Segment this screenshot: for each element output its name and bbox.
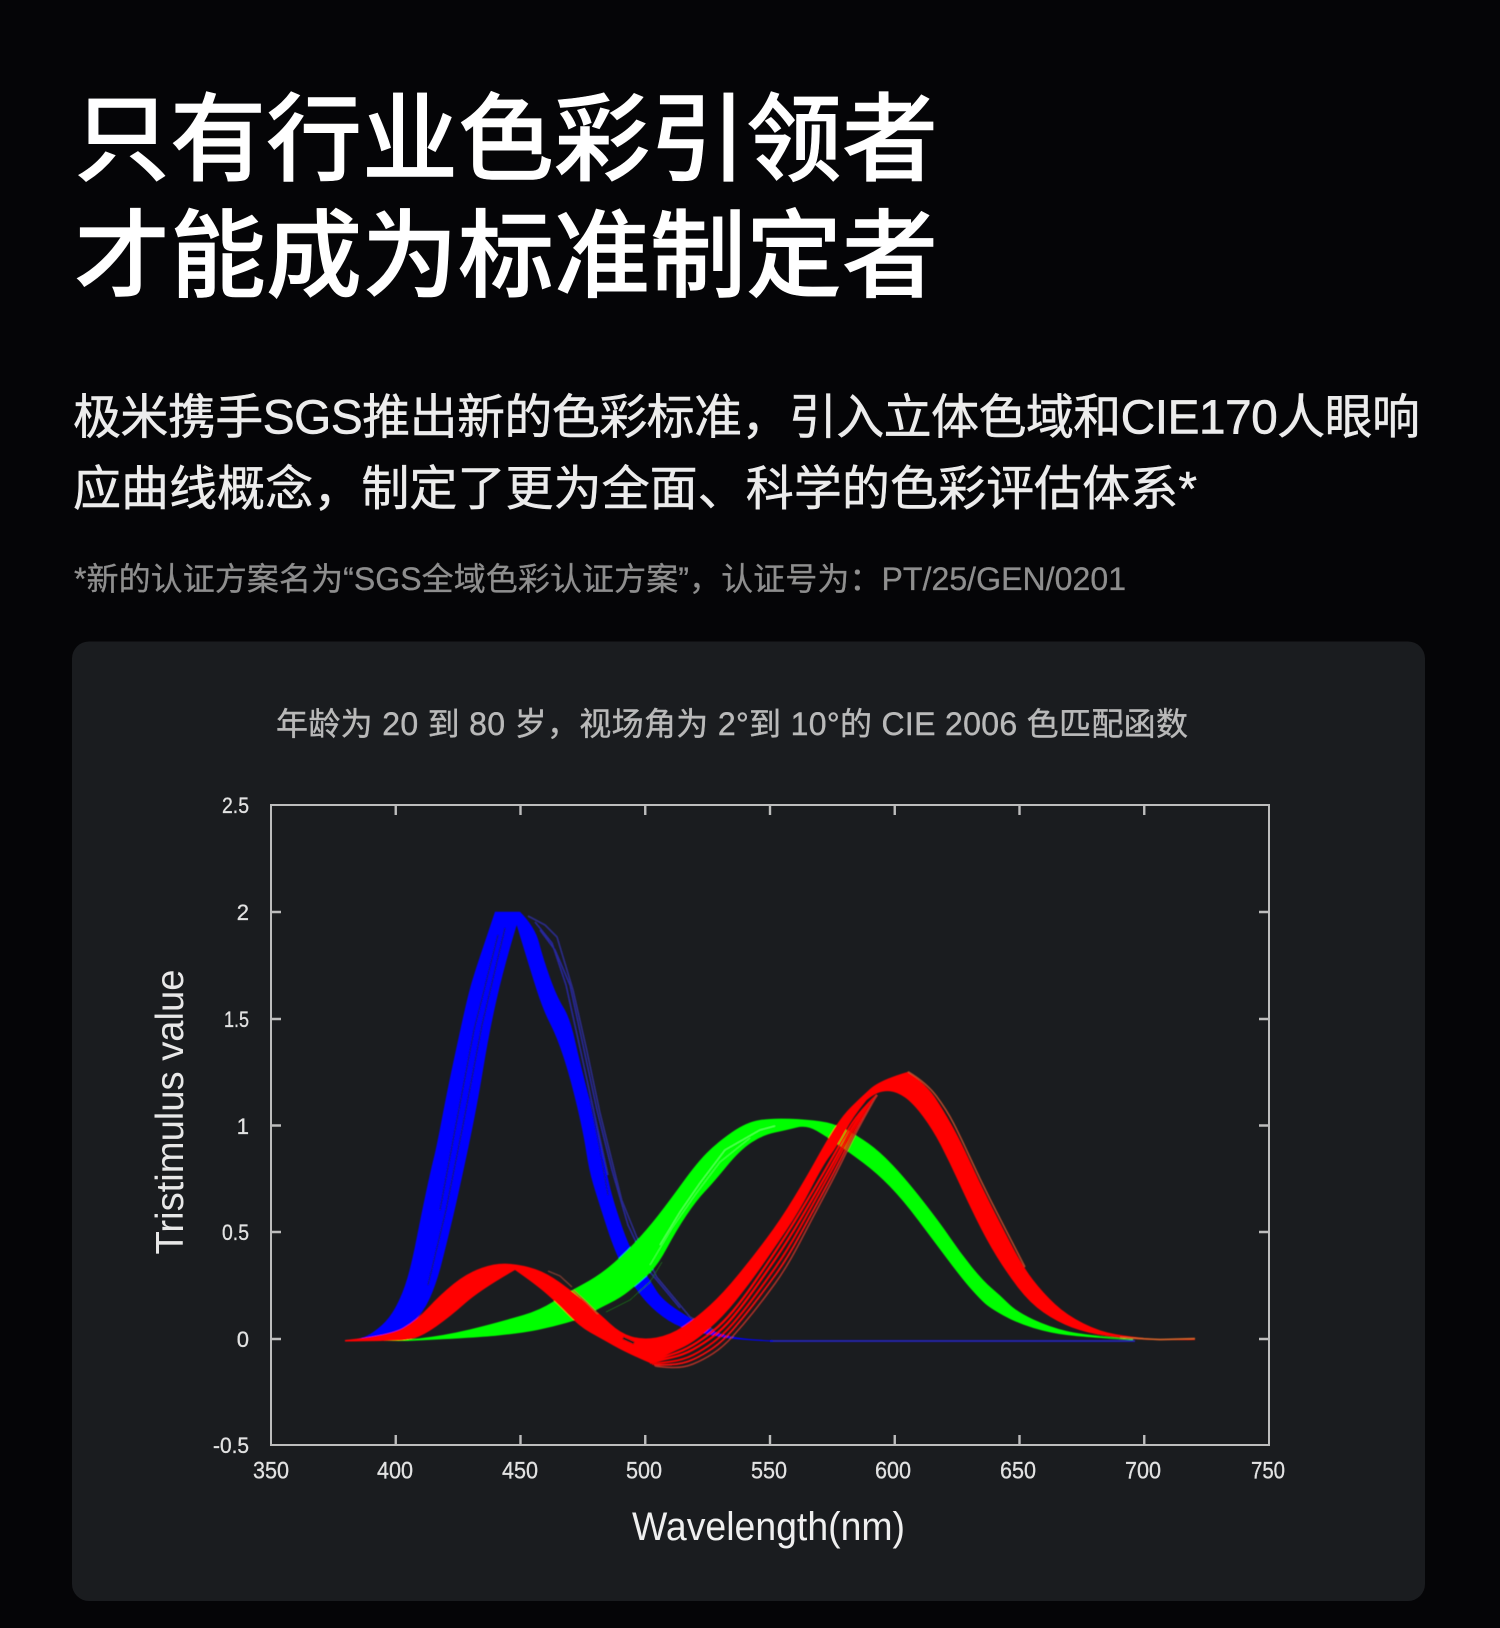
description text: 极米携手SGS推出新的色彩标准，引入立体色域和CIE170人眼响 bbox=[73, 392, 1420, 444]
x axis tick labels: 550 bbox=[751, 1458, 787, 1484]
title: 才能成为标准制定者 bbox=[74, 204, 938, 310]
green band bbox=[380, 1119, 1133, 1341]
x axis tick labels: 750 bbox=[1251, 1458, 1285, 1484]
y axis tick labels bbox=[213, 793, 249, 1458]
y axis tick labels: 2 bbox=[237, 900, 249, 925]
y axis tick labels: 1.5 bbox=[224, 1007, 249, 1032]
x axis tick labels: 450 bbox=[502, 1458, 538, 1484]
blue band bbox=[345, 912, 1135, 1342]
description text: 应曲线概念，制定了更为全面、科学的色彩评估体系* bbox=[73, 463, 1197, 516]
x axis tick labels: 500 bbox=[626, 1458, 662, 1484]
x axis tick labels: 700 bbox=[1125, 1458, 1161, 1484]
x axis tick labels bbox=[253, 1458, 1285, 1484]
x axis title: Wavelength(nm) bbox=[632, 1505, 905, 1549]
x axis tick labels: 350 bbox=[253, 1458, 289, 1484]
x axis tick labels: 650 bbox=[1000, 1458, 1036, 1484]
footnote: *新的认证方案名为“SGS全域色彩认证方案”，认证号为：PT/25/GEN/0201 bbox=[74, 561, 1126, 597]
y axis tick labels: 1 bbox=[237, 1114, 249, 1139]
chart title: 年龄为 20 到 80 岁，视场角为 2°到 10°的 CIE 2006 色匹配函数 bbox=[276, 706, 1188, 742]
title: 只有行业色彩引领者 bbox=[74, 87, 938, 194]
x axis tick labels: 600 bbox=[875, 1458, 911, 1484]
red band bbox=[345, 1072, 1195, 1368]
description text bbox=[73, 392, 1420, 516]
y axis tick labels: 2.5 bbox=[222, 793, 249, 818]
y axis tick labels: -0.5 bbox=[213, 1433, 249, 1458]
y axis title: Tristimulus value bbox=[149, 970, 192, 1254]
x axis tick labels: 400 bbox=[377, 1458, 413, 1484]
y axis tick labels: 0 bbox=[237, 1327, 249, 1352]
y axis tick labels: 0.5 bbox=[222, 1220, 249, 1245]
line chart: plot frame and ticks bbox=[271, 805, 1269, 1445]
panel: chart card bbox=[72, 642, 1425, 1601]
title bbox=[74, 87, 938, 310]
curves: colour matching function bands bbox=[345, 912, 1195, 1368]
